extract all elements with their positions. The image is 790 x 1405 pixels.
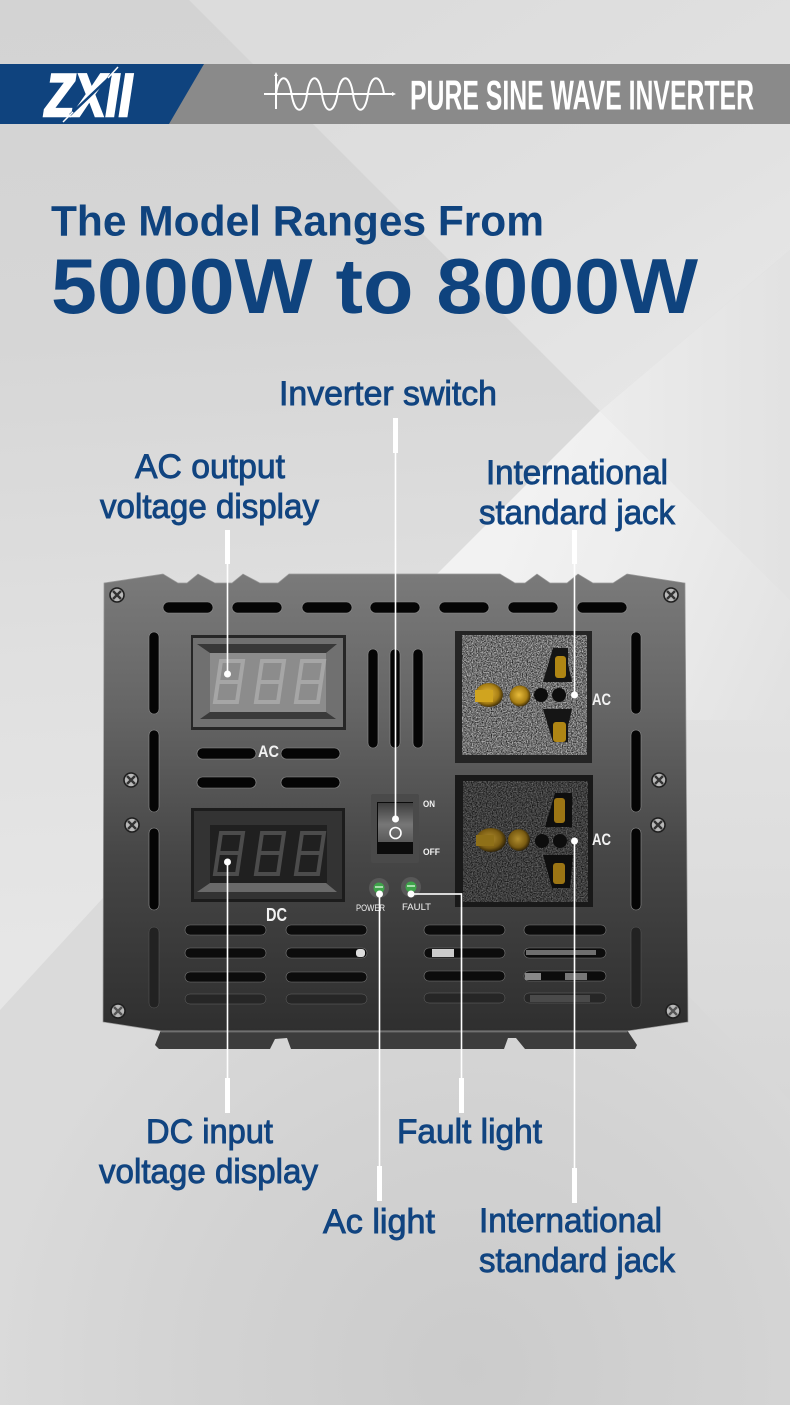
socket top <box>455 631 592 763</box>
panel printed labels: POWER <box>356 903 385 914</box>
panel printed labels: AC <box>592 830 611 849</box>
panel printed labels: AC <box>258 742 279 761</box>
callout: international standard jack top: International <box>486 454 668 492</box>
panel printed labels: FAULT <box>402 902 431 913</box>
callout: inverter switch: Inverter switch <box>279 375 497 413</box>
AC voltage display <box>191 635 346 730</box>
inverter front panel <box>103 574 688 1049</box>
callout: AC output voltage display: voltage display <box>100 488 319 526</box>
logo ZXII: ZXII <box>43 62 133 129</box>
panel printed labels <box>258 690 611 925</box>
callout: international standard jack bottom: International <box>479 1202 662 1240</box>
callout: DC input voltage display <box>99 858 318 1191</box>
callout: international standard jack top <box>479 454 676 698</box>
logo blue block <box>0 64 204 124</box>
callout: DC input voltage display: DC input <box>146 1113 274 1151</box>
panel printed labels: ON <box>423 799 435 810</box>
callout: ac light <box>323 890 436 1241</box>
socket bottom <box>455 775 593 907</box>
callout: international standard jack top: standard jack <box>479 494 676 532</box>
screws <box>110 588 680 1018</box>
callout: fault light <box>397 890 543 1151</box>
heading <box>51 198 698 330</box>
callout: international standard jack bottom <box>479 838 676 1280</box>
callout: ac light: Ac light <box>323 1203 436 1241</box>
callout: inverter switch <box>279 375 497 822</box>
callout: AC output voltage display: AC output <box>135 448 286 486</box>
lower vent grills <box>185 925 606 1004</box>
callout: fault light: Fault light <box>397 1113 543 1151</box>
callout: international standard jack bottom: standard jack <box>479 1242 676 1280</box>
heading: The Model Ranges From <box>51 198 544 246</box>
panel printed labels: OFF <box>423 847 440 858</box>
panel printed labels: DC <box>266 905 287 925</box>
callout: DC input voltage display: voltage display <box>99 1153 318 1191</box>
panel foot <box>155 1030 637 1049</box>
power and fault LEDs <box>369 877 421 898</box>
panel body <box>103 574 688 1031</box>
DC voltage display <box>191 808 345 902</box>
top vent slots <box>149 602 641 910</box>
header banner <box>0 62 790 129</box>
icon: sine wave <box>264 72 396 110</box>
rocker switch <box>371 794 419 863</box>
panel printed labels: AC <box>592 690 611 709</box>
header grey bar <box>0 64 790 124</box>
heading: 5000W to 8000W <box>51 242 698 330</box>
callout: AC output voltage display <box>100 448 319 678</box>
